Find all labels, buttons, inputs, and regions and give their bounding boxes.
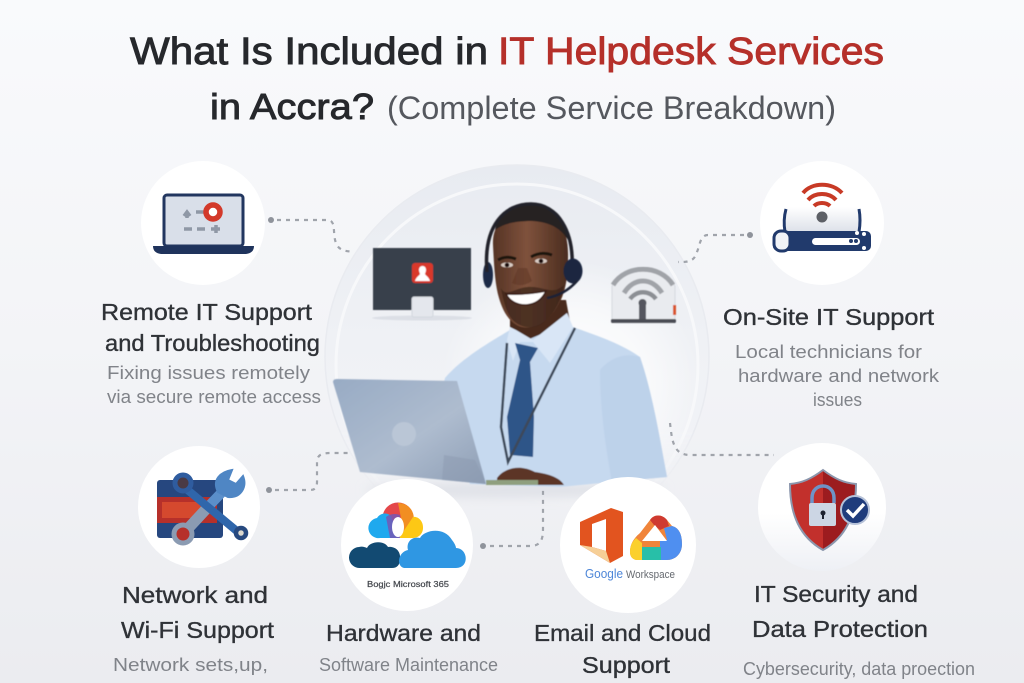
- agent: headband: [487, 204, 572, 272]
- agent: ear cup near: [564, 258, 582, 284]
- icon: laptop: [141, 161, 265, 285]
- agent: head: [493, 210, 568, 327]
- agent: ear cup far: [483, 262, 493, 288]
- title: (Complete Service Breakdown): [387, 90, 836, 126]
- connector: hardware maintenance: [480, 488, 543, 549]
- heading: Support: [582, 652, 671, 678]
- description: Software Maintenance: [319, 654, 498, 675]
- description: [735, 341, 940, 410]
- agent: smile: [506, 291, 546, 305]
- icon: office and google cloud logos: [560, 477, 696, 613]
- monitor icon: [372, 248, 472, 320]
- heading: Data Protection: [752, 616, 928, 642]
- agent: keyboard strip: [486, 480, 538, 485]
- title: [130, 31, 884, 127]
- description: Network sets,up,: [113, 654, 268, 675]
- description: via secure remote access: [107, 386, 321, 407]
- panel: email and cloud support: [534, 477, 711, 678]
- heading: Email and Cloud: [534, 620, 711, 646]
- connector: security: [670, 423, 774, 455]
- connector: remote support: [268, 217, 354, 252]
- heading: [121, 582, 275, 643]
- heading: [101, 299, 320, 356]
- agent: neck: [510, 300, 570, 340]
- heading: [752, 581, 928, 642]
- wifi device icon: [611, 269, 676, 323]
- heading: Wi-Fi Support: [121, 617, 275, 643]
- agent: microphone boom: [547, 281, 577, 298]
- description: Local technicians for: [735, 341, 922, 362]
- description: hardware and network: [738, 365, 940, 386]
- heading: Network and: [122, 582, 268, 608]
- description: Fixing issues remotely: [107, 362, 311, 383]
- agent: tie: [507, 343, 538, 457]
- heading: [534, 620, 711, 678]
- laptop (foreground): [333, 379, 486, 484]
- panel: IT security and data protection: [743, 443, 975, 679]
- icon: router: [760, 161, 884, 285]
- agent: hair: [495, 204, 568, 240]
- description: issues: [813, 389, 862, 410]
- description: [107, 362, 321, 407]
- heading: IT Security and: [754, 581, 918, 607]
- panel: hardware and software maintenance: [319, 479, 498, 675]
- central orb backdrop: [324, 164, 710, 498]
- panel: network and wi-fi support: [113, 446, 275, 675]
- icon: clouds: [341, 479, 473, 611]
- agent: sleeve shading: [600, 355, 667, 482]
- heading: Hardware and: [326, 620, 481, 646]
- title: What Is Included in: [130, 31, 488, 73]
- agent: nose: [512, 268, 532, 285]
- icon: shield: [758, 443, 886, 571]
- heading: On-Site IT Support: [723, 304, 935, 330]
- icon: tools: [138, 446, 260, 568]
- description: Cybersecurity, data proection: [743, 658, 975, 679]
- agent: shirt: [440, 327, 667, 487]
- icon: clouds: Bogjc Microsoft 365: [367, 580, 450, 589]
- agent: beard: [501, 285, 564, 327]
- title: IT Helpdesk Services: [498, 31, 884, 73]
- connector: on-site support: [678, 232, 753, 262]
- icon: office and google cloud logos: Google: [585, 567, 623, 581]
- panel: remote IT support: [101, 161, 321, 407]
- agent: collar: [507, 313, 573, 363]
- helpdesk agent: [440, 204, 667, 487]
- heading: Remote IT Support: [101, 299, 313, 325]
- panel: on-site IT support: [723, 161, 940, 410]
- icon: office and google cloud logos: Workspace: [626, 569, 675, 581]
- heading: and Troubleshooting: [105, 330, 320, 356]
- title: in Accra?: [210, 86, 374, 127]
- agent: hand: [497, 468, 564, 485]
- agent: eyes and brows: [498, 253, 552, 268]
- agent: lanyard: [501, 328, 575, 462]
- connector: network support: [266, 453, 352, 493]
